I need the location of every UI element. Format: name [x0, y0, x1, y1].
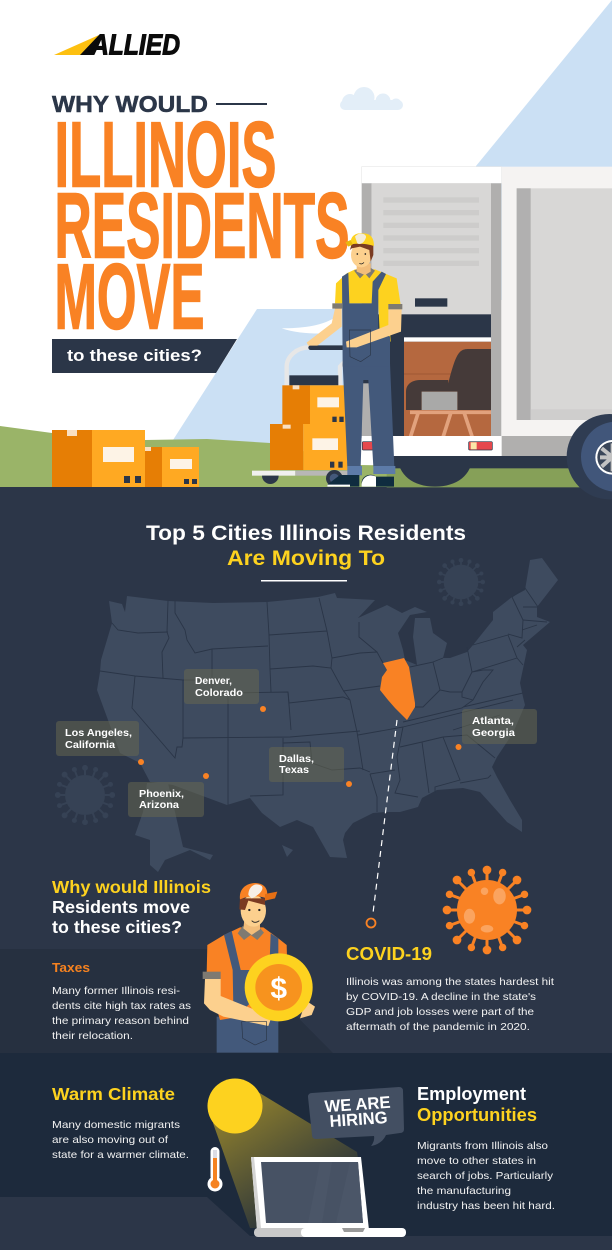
Illinois — [380, 658, 415, 720]
text: employment opportunities: search of jobs. Particularly — [417, 1170, 554, 1182]
chair — [406, 349, 491, 410]
overalls legs — [343, 363, 394, 467]
text: taxes — [52, 960, 191, 1042]
truck side — [502, 167, 612, 437]
label: Los Angeles: Los Angeles, — [65, 727, 132, 739]
text: warm climate — [52, 1084, 189, 1161]
text: warm climate: state for a warmer climate. — [52, 1149, 189, 1161]
label: Phoenix: Arizona — [139, 799, 179, 811]
label: Los Angeles: California — [65, 739, 115, 751]
title: RESIDENTS — [54, 174, 350, 278]
label: Denver: Colorado — [195, 687, 243, 699]
truck — [362, 167, 612, 499]
text: taxes: Taxes — [52, 960, 90, 975]
icon: orange virus — [443, 866, 531, 954]
text: covid-19: by COVID-19. A decline in the state's — [346, 991, 536, 1003]
shirt — [207, 927, 287, 1020]
text: taxes: Many former Illinois resi- — [52, 985, 181, 997]
icon: thermometer — [208, 1147, 222, 1192]
text: covid-19: GDP and job losses were part of the — [346, 1006, 534, 1018]
arms — [307, 308, 342, 346]
truck interior — [362, 314, 491, 438]
heading: why would illinois residents: Residents move — [52, 897, 190, 917]
text: covid-19 — [346, 944, 554, 1033]
label: Dallas: Dallas, — [279, 753, 314, 765]
shirt — [335, 269, 401, 342]
bib and straps — [342, 272, 390, 367]
logo: ALLIED — [90, 30, 180, 62]
icon: laptop — [251, 1157, 406, 1237]
speech bubble: we are hiring — [308, 1087, 404, 1146]
label: Atlanta: Georgia — [472, 727, 515, 739]
icon: sun — [208, 1078, 262, 1134]
band: bottom — [0, 1053, 612, 1236]
band: taxes — [0, 949, 333, 1053]
land — [97, 558, 558, 858]
bib and straps — [224, 931, 278, 1007]
text: warm climate: Many domestic migrants — [52, 1119, 180, 1131]
collar — [354, 267, 375, 278]
text: employment opportunities: move to other states in — [417, 1155, 536, 1167]
text: taxes: their relocation. — [52, 1030, 133, 1042]
text: warm climate: are also moving out of — [52, 1134, 168, 1146]
cap — [240, 883, 267, 899]
text: employment opportunities: Migrants from Illinois also — [417, 1140, 548, 1152]
chassis — [393, 456, 580, 468]
label: Phoenix: Phoenix, — [139, 788, 184, 800]
spotlight beam — [213, 1092, 369, 1228]
label: Atlanta: Atlanta, — [472, 715, 514, 727]
grass — [0, 426, 612, 487]
marker — [456, 744, 462, 750]
speech bubble: we are hiring: HIRING — [329, 1108, 388, 1131]
US map — [97, 558, 558, 872]
text: warm climate: Warm Climate — [52, 1084, 175, 1104]
sky mountain upper right — [476, 0, 612, 300]
map heading — [146, 522, 466, 582]
baja — [135, 783, 213, 872]
pocket — [242, 1022, 267, 1045]
banner: to these cities: to these cities? — [67, 346, 202, 365]
base plate and wheels — [252, 471, 295, 476]
icon: cloud — [340, 87, 403, 110]
state lines — [100, 588, 547, 812]
icon: faint virus top — [437, 558, 485, 606]
heading: why would illinois residents: Why would Illinois — [52, 877, 211, 897]
label: Phoenix — [128, 773, 209, 817]
marker — [138, 759, 144, 765]
logo — [54, 30, 180, 62]
label: Dallas: Texas — [279, 764, 309, 776]
text: employment opportunities: Employment — [417, 1084, 526, 1104]
worker with coin — [203, 883, 315, 1053]
title — [54, 102, 350, 348]
speech bubble: we are hiring: WE ARE — [324, 1093, 391, 1116]
pocket — [349, 330, 371, 362]
label: Denver: Denver, — [195, 675, 232, 687]
head — [357, 263, 371, 275]
dashed connector — [366, 720, 397, 928]
text: taxes: the primary reason behind — [52, 1015, 189, 1027]
boxes on hand truck — [282, 385, 310, 424]
heading: why would: WHY WOULD — [52, 91, 208, 117]
coin — [245, 953, 313, 1021]
sky mountain lower — [173, 309, 345, 470]
hand — [300, 1001, 315, 1018]
text: employment opportunities — [417, 1084, 555, 1212]
arm — [204, 979, 272, 1026]
worker with coin: $ — [270, 972, 287, 1005]
worker with hand truck — [252, 233, 402, 487]
cap — [351, 233, 374, 246]
text: covid-19: COVID-19 — [346, 944, 432, 964]
marker — [346, 781, 352, 787]
text: covid-19: Illinois was among the states hardest hit — [346, 976, 554, 988]
title: MOVE — [54, 244, 204, 348]
roller door — [362, 183, 372, 317]
text: covid-19: aftermath of the pandemic in 2020. — [346, 1021, 530, 1033]
hand truck frame — [287, 347, 358, 385]
ground strip — [387, 467, 612, 487]
heading: why would illinois residents — [52, 877, 211, 937]
marker — [260, 706, 266, 712]
icon: faint virus left — [55, 765, 115, 825]
bumper — [362, 436, 502, 455]
white swoosh — [282, 318, 335, 333]
label: Denver — [184, 669, 266, 712]
truck top bar — [362, 167, 502, 183]
wheel — [567, 414, 612, 499]
label: Los Angeles — [56, 721, 144, 765]
banner: to these cities — [52, 339, 237, 373]
boxes on ground — [52, 430, 199, 487]
text: employment opportunities: Opportunities — [417, 1105, 537, 1125]
label: Atlanta — [456, 709, 537, 750]
text: employment opportunities: industry has been hit hard. — [417, 1200, 555, 1212]
collar — [238, 926, 264, 940]
marker — [203, 773, 209, 779]
cuffs and shoes — [347, 466, 362, 475]
overalls lower — [217, 1017, 278, 1053]
heading: why would illinois residents: to these cities? — [52, 917, 182, 937]
head — [243, 915, 260, 935]
text: taxes: dents cite high tax rates as — [52, 1000, 191, 1012]
hero panel — [0, 0, 612, 487]
map heading: Top 5 Cities Illinois Residents — [146, 522, 466, 545]
map heading: Are Moving To — [227, 547, 385, 570]
cargo — [404, 342, 491, 438]
label: Dallas — [269, 747, 352, 787]
text: employment opportunities: the manufacturing — [417, 1185, 511, 1197]
title: ILLINOIS — [54, 102, 276, 206]
